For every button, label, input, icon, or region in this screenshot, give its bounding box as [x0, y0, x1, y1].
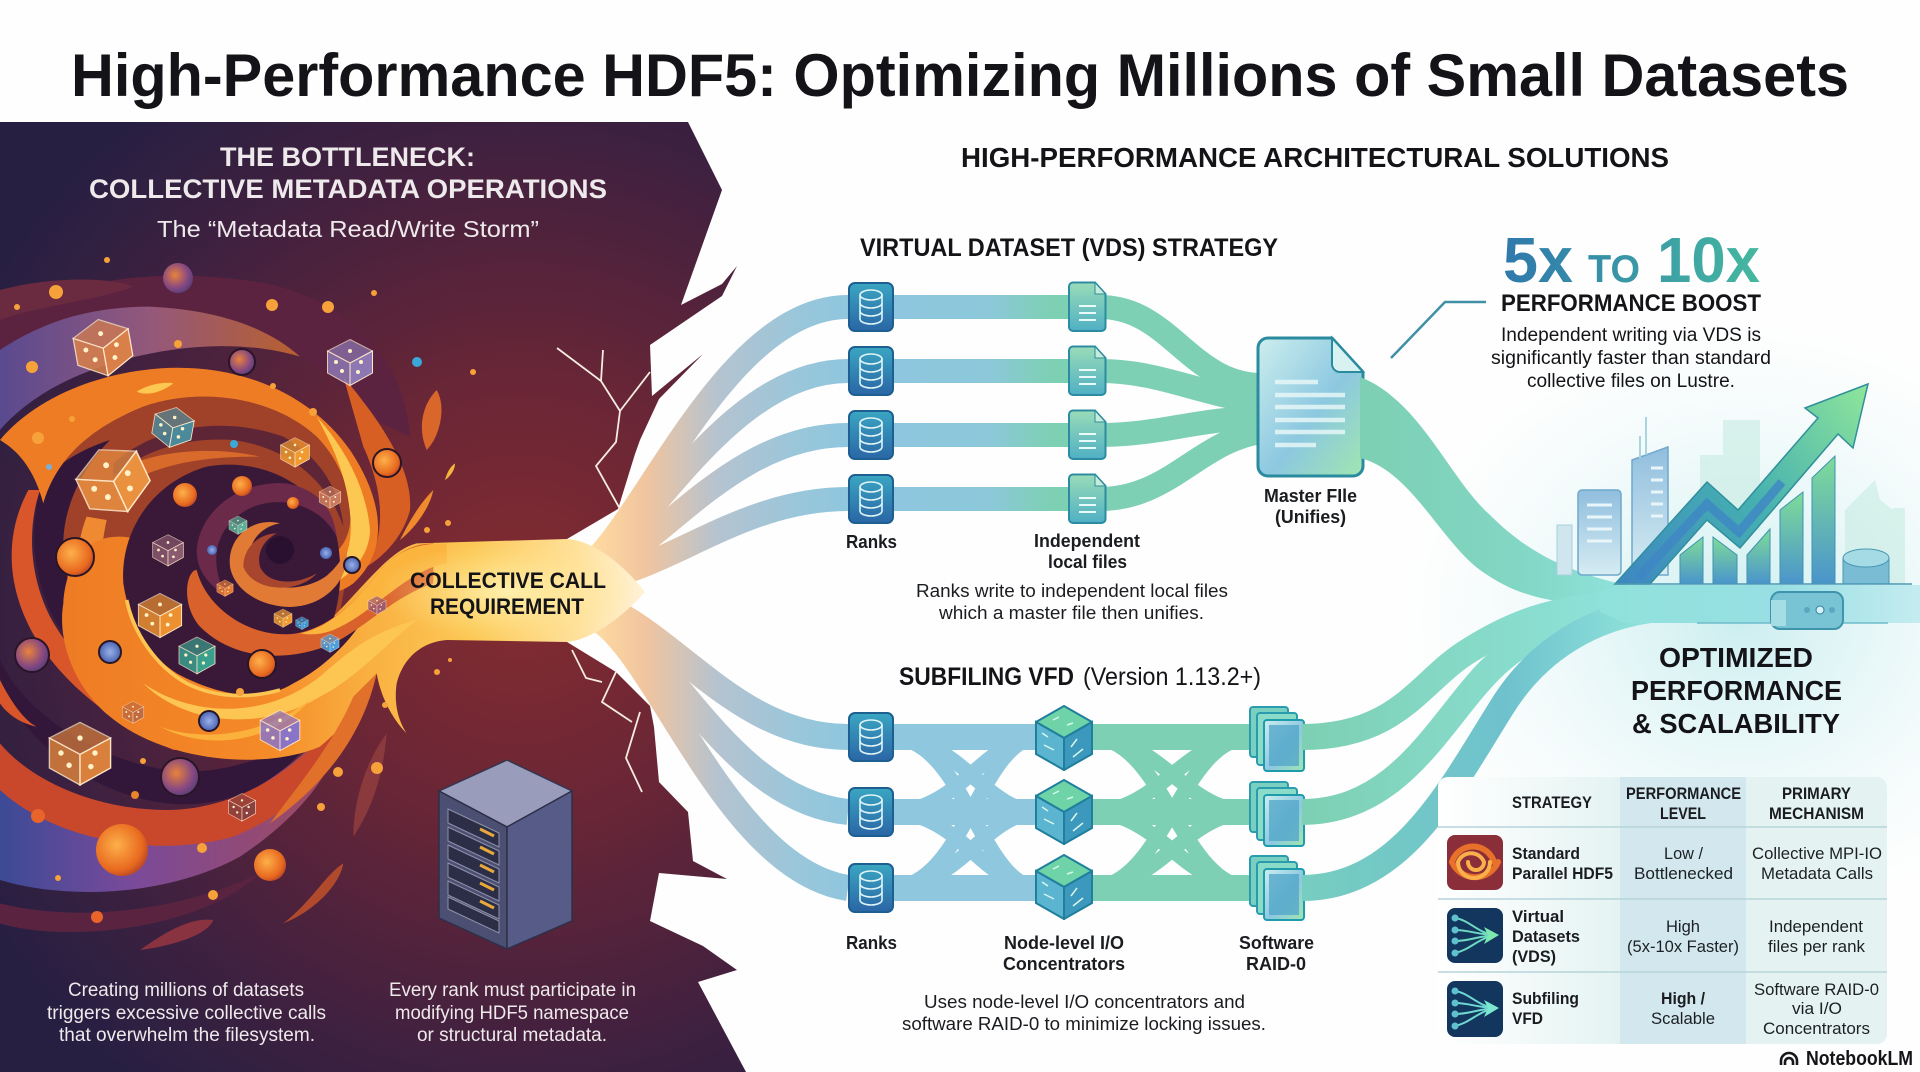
text: creating millions of datasets: that overwhelm the filesystem. [59, 1025, 315, 1046]
heading: optimized performance [1631, 642, 1842, 739]
heading: version: (Version 1.13.2+) [1083, 663, 1261, 691]
flow branches from the collective call to the ranks [590, 307, 848, 888]
rank to file bands [890, 307, 1072, 499]
boost description: significantly faster than standard [1491, 348, 1771, 369]
main beam: lower arm into neck [62, 537, 645, 760]
text: every rank must participate [389, 980, 636, 1046]
table header: PERFORMANCE [1626, 784, 1741, 803]
swirl vortex and collective call beam [0, 276, 645, 950]
inner dark hole [123, 465, 373, 695]
background glow: optimized performance [1400, 320, 1920, 920]
storage cylinder [1843, 549, 1889, 584]
red-orange lower band [0, 667, 367, 846]
rank icons [849, 713, 893, 912]
lightning cracks [557, 348, 650, 792]
row: standard parallel HDF5: Parallel HDF5 [1512, 864, 1613, 883]
description: VDS [916, 581, 1228, 623]
center swirl [230, 522, 347, 607]
green crossing bands [1090, 737, 1252, 888]
text: creating millions of datasets: Creating millions of datasets [68, 980, 304, 1001]
row: virtual datasets: (5x-10x Faster) [1627, 937, 1739, 956]
description: subfiling [902, 992, 1266, 1034]
panel: VDS strategy [846, 234, 1363, 623]
panel: the bottleneck background [0, 122, 746, 1072]
section heading: solutions: HIGH-PERFORMANCE ARCHITECTURAL SOLUTIONS [961, 142, 1669, 173]
row: subfiling VFD: VFD [1512, 1009, 1543, 1028]
row: subfiling VFD: High / [1661, 989, 1705, 1008]
row: subfiling VFD: via I/O [1792, 999, 1842, 1018]
boost description: collective files on Lustre. [1527, 371, 1735, 392]
lower outer wisps [0, 873, 260, 932]
outward flame streak [270, 673, 377, 823]
ghost skyline [1700, 420, 1905, 584]
row: subfiling VFD: Subfiling [1512, 989, 1579, 1008]
neck glow [378, 542, 638, 642]
text: every rank must participate: or structural metadata. [417, 1025, 607, 1046]
row: standard parallel HDF5: Collective MPI-IO [1752, 844, 1882, 863]
table header [1512, 784, 1864, 823]
row: virtual datasets: files per rank [1768, 937, 1865, 956]
panel heading: THE BOTTLENECK: [220, 142, 475, 172]
labels: subfiling [846, 933, 1314, 974]
heading: optimized performance: OPTIMIZED [1659, 642, 1813, 673]
labels: VDS: Master FIle [1264, 486, 1357, 506]
rank icons [849, 283, 893, 523]
RAID stacks [1250, 707, 1304, 920]
concentrator cubes [1036, 706, 1092, 919]
heading: VDS: VIRTUAL DATASET (VDS) STRATEGY [860, 234, 1278, 262]
panel: subfiling VFD [846, 663, 1314, 1034]
purple upper band [0, 307, 300, 430]
panel heading: The “Metadata Read/Write Storm” [157, 216, 539, 242]
row: virtual datasets [1447, 907, 1865, 966]
text: creating millions of datasets: triggers excessive collective calls [47, 1003, 326, 1024]
big number: 5x [1503, 224, 1573, 296]
dark left crescent [34, 440, 117, 687]
big number: TO [1588, 248, 1640, 291]
flames on the right side [343, 377, 410, 567]
description: subfiling: Uses node-level I/O concentrators and [924, 992, 1245, 1012]
label: collective call requirement: COLLECTIVE CALL [410, 568, 606, 593]
labels: subfiling: RAID-0 [1246, 954, 1306, 974]
row: virtual datasets: High [1666, 917, 1700, 936]
labels: VDS: Independent [1034, 531, 1140, 551]
boost heading: PERFORMANCE BOOST [1501, 290, 1761, 317]
table header: PRIMARY [1782, 784, 1852, 803]
panel heading: COLLECTIVE METADATA OPERATIONS [89, 174, 607, 204]
heading: subfiling: SUBFILING VFD [899, 663, 1074, 691]
description: VDS: which a master file then unifies. [938, 603, 1204, 623]
icon: converging arrow [1447, 981, 1503, 1037]
big number [1503, 224, 1760, 296]
table header: MECHANISM [1769, 804, 1864, 823]
metadata spheres [15, 263, 401, 881]
row: virtual datasets: Datasets [1512, 927, 1580, 946]
row: standard parallel HDF5: Metadata Calls [1761, 864, 1873, 883]
row: virtual datasets: Independent [1769, 917, 1863, 936]
comparison table [1438, 777, 1887, 1044]
row: subfiling VFD: Software RAID-0 [1754, 980, 1879, 999]
converging output flows [1302, 377, 1920, 888]
sparks [14, 257, 476, 923]
labels: subfiling: Software [1239, 933, 1314, 953]
row: standard parallel HDF5: Standard [1512, 844, 1580, 863]
row: subfiling VFD: Scalable [1651, 1009, 1715, 1028]
yellow streaks on the lower arm [143, 620, 417, 719]
text: creating millions of datasets [47, 980, 326, 1046]
outer left band [12, 490, 233, 750]
labels: subfiling: Node-level I/O [1004, 933, 1124, 953]
upper orange arm [0, 368, 378, 594]
bars [1680, 456, 1835, 584]
labels: VDS: Ranks [846, 532, 897, 552]
growth chart illustration [1557, 384, 1912, 629]
labels: VDS: (Unifies) [1275, 507, 1346, 527]
dark lower crescent [0, 660, 320, 804]
purple lower sweep [0, 700, 350, 892]
row: virtual datasets: (VDS) [1512, 947, 1556, 966]
row: virtual datasets: Virtual [1512, 907, 1564, 926]
heading: optimized performance: & SCALABILITY [1632, 708, 1840, 739]
master file icon [1258, 338, 1363, 476]
label: collective call requirement: REQUIREMENT [430, 594, 585, 619]
row: standard parallel HDF5: Bottlenecked [1634, 864, 1733, 883]
server rack icon [439, 760, 572, 949]
row: subfiling VFD [1447, 980, 1879, 1038]
description: VDS: Ranks write to independent local files [916, 581, 1228, 601]
rising arrow [1615, 384, 1868, 584]
row: standard parallel HDF5: Low / [1664, 844, 1703, 863]
text: every rank must participate: modifying HDF5 namespace [395, 1003, 629, 1024]
labels: subfiling: Ranks [846, 933, 897, 953]
file to master bands [1100, 307, 1262, 499]
ring streaks [113, 426, 343, 527]
row: standard parallel HDF5 [1447, 835, 1882, 890]
boost description: Independent writing via VDS is [1501, 325, 1761, 346]
storage device [1697, 592, 1888, 629]
description: subfiling: software RAID-0 to minimize locking issues. [902, 1014, 1266, 1034]
text: every rank must participate: Every rank must participate in [389, 980, 636, 1001]
yellow rim of the hole [127, 600, 280, 696]
label: collective call requirement [410, 568, 606, 619]
table background [1438, 777, 1887, 1044]
row: subfiling VFD: Concentrators [1763, 1019, 1870, 1038]
icon: converging arrow [1447, 908, 1503, 963]
yellow highlight of the arm [317, 417, 370, 587]
top outer swath [0, 276, 410, 437]
blue crossing bands [890, 737, 1040, 888]
icon: swirl [1447, 835, 1503, 890]
labels: VDS [846, 486, 1357, 572]
callout: performance boost [1391, 224, 1771, 392]
baseline [1615, 583, 1912, 585]
table header: STRATEGY [1512, 793, 1593, 812]
title: High-Performance HDF5: Optimizing Millions of Small Datasets [71, 42, 1849, 109]
labels: subfiling: Concentrators [1003, 954, 1125, 974]
heading: optimized performance: PERFORMANCE [1631, 675, 1842, 706]
boost description [1491, 325, 1771, 392]
big number: 10x [1657, 224, 1760, 296]
table header: LEVEL [1660, 804, 1706, 823]
labels: VDS: local files [1048, 552, 1127, 572]
buildings [1557, 417, 1668, 575]
dice in the storm [49, 315, 386, 821]
leader line [1391, 302, 1486, 358]
brown ring interior [43, 397, 357, 677]
inner bands [197, 483, 337, 597]
panel heading [89, 142, 607, 242]
file icons [1069, 282, 1106, 523]
